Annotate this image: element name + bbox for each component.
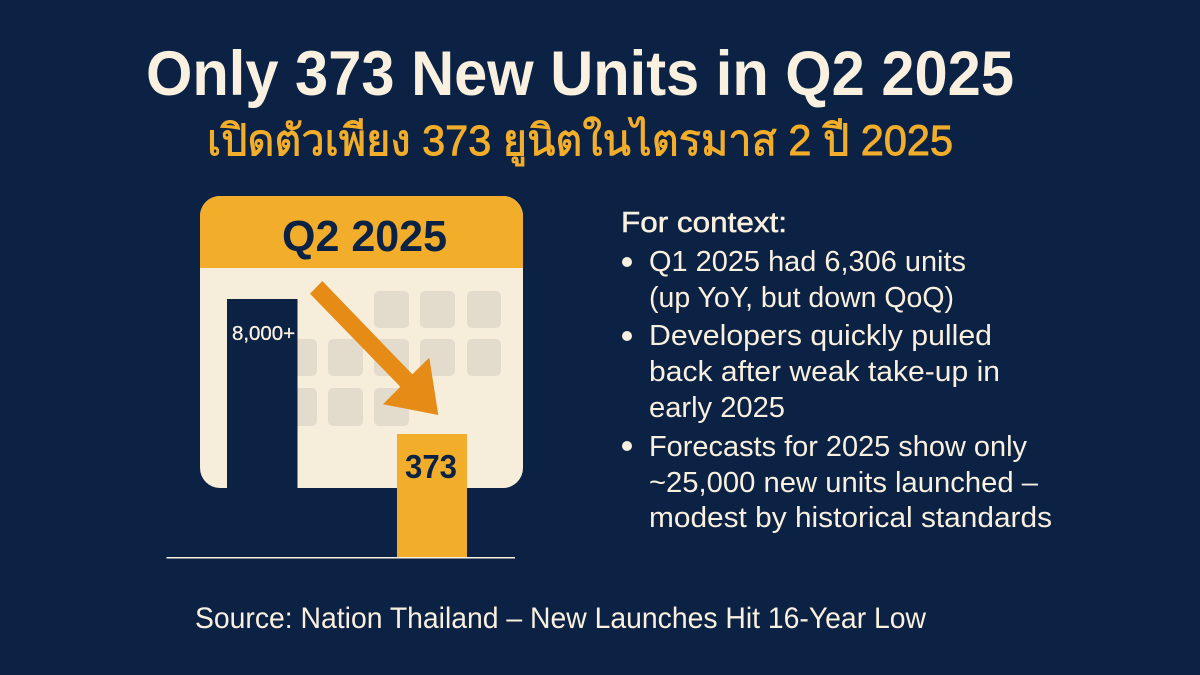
calendar header: [200, 196, 523, 268]
bullet: developers: back after weak take-up in: [649, 356, 1000, 388]
bullet: forecasts: Forecasts for 2025 show only: [649, 431, 1027, 463]
bullet: forecasts: modest by historical standards: [649, 502, 1052, 534]
bullet: forecasts: [622, 431, 1052, 534]
short bar: 373: [397, 434, 467, 557]
calendar header label: Q2 2025: [282, 212, 447, 261]
bullet: Q1 2025: Q1 2025 had 6,306 units: [649, 246, 966, 278]
chart baseline: [166, 557, 515, 558]
subtitle in Thai: เปิดตัวเพียง 373 ยูนิตในไตรมาส 2 ปี 2025: [207, 116, 953, 167]
bullet: Q1 2025: (up YoY, but down QoQ): [649, 282, 954, 314]
context heading: For context:: [621, 207, 787, 239]
bullet: forecasts: ~25,000 new units launched –: [649, 467, 1039, 499]
bullet: Q1 2025: [622, 246, 966, 314]
bullet: developers: Developers quickly pulled: [649, 320, 992, 352]
arrow: downward trend: [310, 281, 438, 415]
source line: Source: Nation Thailand – New Launches Hit 16-Year Low: [195, 602, 926, 635]
calendar day grid: [282, 291, 501, 426]
panel: calendar bar chart: [166, 196, 523, 558]
bullet: developers: early 2025: [649, 392, 785, 424]
title: Only 373 New Units in Q2 2025: [146, 39, 1014, 109]
short bar: 373: 373: [405, 448, 457, 485]
bullet: developers: [622, 320, 1000, 424]
tall bar: 8,000+: 8,000+: [232, 323, 295, 345]
calendar body: [200, 196, 523, 488]
panel: context notes: [621, 207, 1052, 534]
tall bar: 8,000+: [227, 299, 298, 488]
